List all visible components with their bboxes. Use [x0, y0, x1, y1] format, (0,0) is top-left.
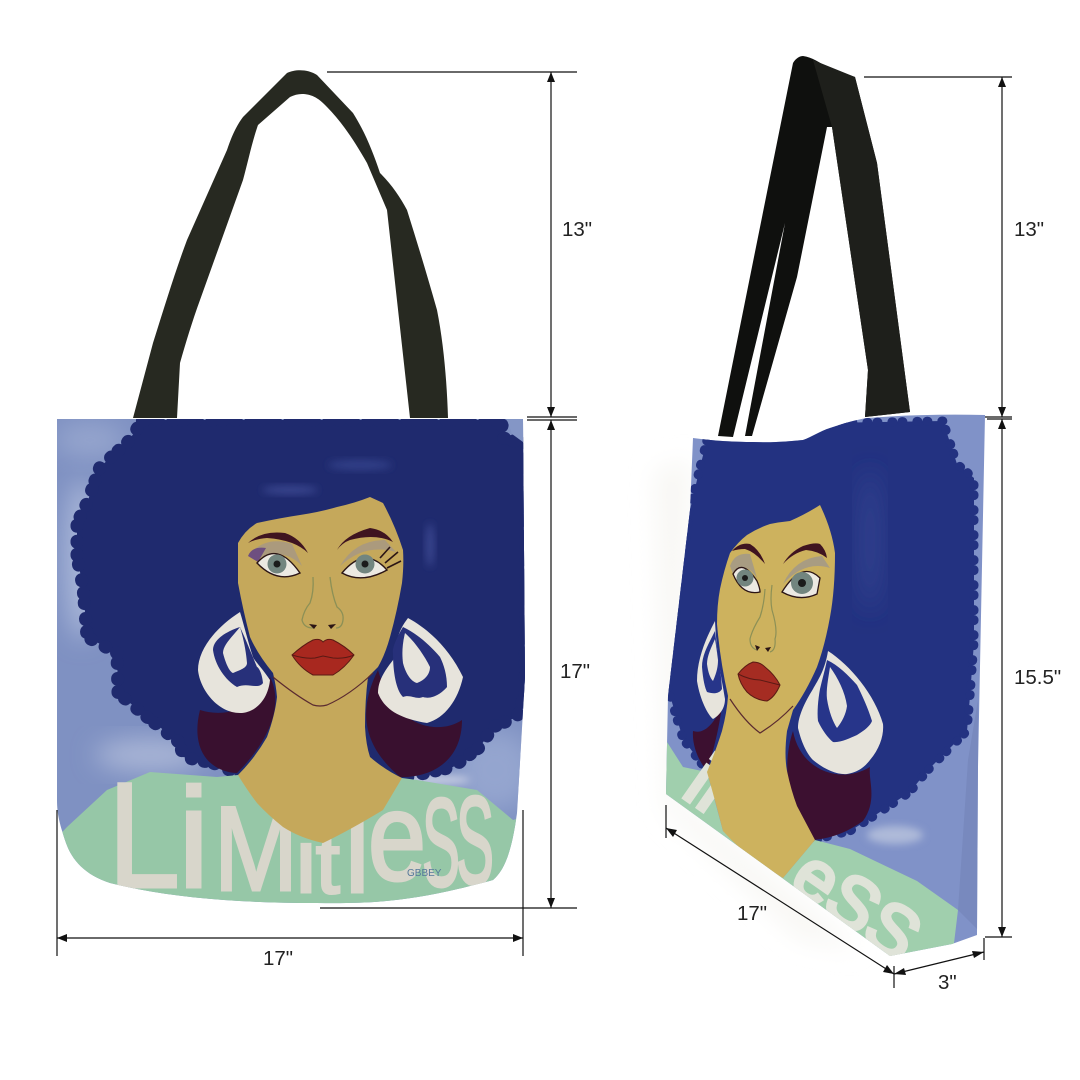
lower hair: [197, 670, 462, 777]
right bag sweater: [660, 742, 958, 960]
left tote bag: [50, 70, 535, 919]
lips: [292, 639, 354, 675]
dimension: right handle height 13: 13": [1014, 218, 1044, 241]
lettering: [117, 782, 492, 895]
left bag body: [50, 415, 535, 919]
right tote bag: [660, 56, 990, 977]
eyebrows: [248, 528, 393, 553]
lettering: M: [214, 782, 298, 916]
right bag body: [660, 410, 990, 977]
right bag handles: [718, 56, 910, 437]
right bag eye shadow: [730, 554, 830, 584]
eyes: [257, 554, 387, 578]
dimension: left handle height 13: 13": [562, 218, 592, 241]
dimension: left bag width 17: [57, 810, 523, 970]
dimension: right bag width 17: 17": [737, 902, 767, 925]
right bag right earring: [798, 651, 883, 774]
right bag lettering: eSS: [778, 834, 935, 977]
lashes: [380, 547, 401, 568]
dimension: right bag width 17: [666, 805, 894, 988]
nostrils: [309, 624, 336, 629]
nose: [302, 577, 343, 628]
dimension: left bag width 17: 17": [263, 947, 293, 970]
dimension: left handle height 13: [327, 72, 592, 417]
right bag lettering: [681, 750, 920, 956]
left bag handles: [133, 70, 448, 418]
right bag nose: [750, 585, 776, 652]
eye shadow: [248, 540, 396, 566]
signature: GBBEY: [407, 868, 442, 879]
lettering: i: [178, 759, 210, 918]
dimension: right body height 15.5: [985, 419, 1061, 937]
lettering: e: [368, 768, 426, 907]
right bag front strap: [813, 60, 910, 417]
lettering: L: [108, 751, 180, 919]
right bag eyes: [733, 567, 820, 598]
right bag nostrils: [755, 645, 771, 652]
dimension: right handle height 13: [864, 77, 1044, 417]
right bag lips: [738, 662, 780, 701]
right bag chin line: [730, 699, 793, 733]
dimension: right body height 15.5: 15.5": [1014, 666, 1061, 689]
right bag lower hair: [693, 706, 871, 840]
hair highlights: [262, 460, 434, 567]
right bag neck and face: [707, 505, 835, 878]
right earring: [378, 618, 463, 723]
neck and face: [238, 497, 403, 843]
right bag hair highlight: [860, 496, 880, 584]
afro hair: [77, 420, 527, 777]
right bag side fold: [958, 700, 978, 930]
chin line: [273, 673, 373, 706]
right bag left earring: [697, 621, 725, 719]
lettering: i: [296, 812, 316, 912]
dimension: left body height 17: 17": [560, 660, 590, 683]
dimension: right bag depth 3: [894, 938, 984, 994]
lettering: S: [422, 774, 460, 913]
dimension: left body height 17: [320, 420, 590, 908]
right bag hair: [668, 421, 974, 840]
right bag eyebrows: [732, 543, 827, 564]
right bag lettering: il: [671, 739, 746, 827]
left earring: [198, 612, 270, 713]
dimension: right bag depth 3: 3": [938, 971, 957, 994]
sweater: [50, 772, 530, 910]
lettering: t: [316, 817, 340, 912]
lettering: l: [345, 793, 369, 916]
left bag body: S: [456, 772, 494, 911]
soft photo shadow behind right bag: [655, 460, 860, 950]
top right bag corner: [508, 422, 524, 442]
